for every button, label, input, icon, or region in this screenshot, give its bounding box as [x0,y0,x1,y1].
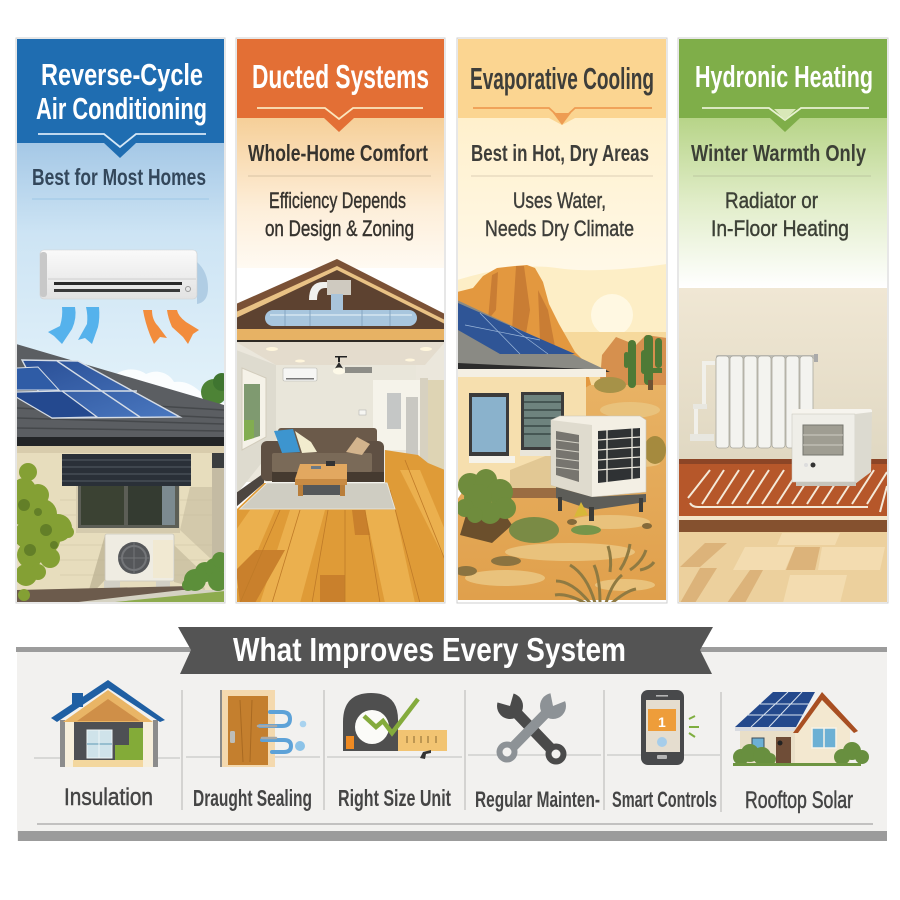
icon: smart phone control [641,690,699,765]
subheading: Best for Most Homes [32,164,206,190]
outdoor unit [104,534,174,590]
sun [591,294,633,336]
floor tiles [678,532,888,603]
icon: wall air conditioner [40,250,208,304]
heading [36,63,206,126]
windows [469,392,564,463]
label: Right Size Unit [338,785,451,811]
boiler unit [792,409,872,486]
panel: ducted systems [236,38,445,603]
label: Smart Controls [612,787,717,812]
title ribbon: What Improves Every System [233,631,626,668]
shrub left [17,463,74,601]
rule lines and chevron [32,134,209,199]
shrub right [182,552,228,591]
icon: insulation house [51,680,165,767]
icon: crossed wrenches [496,690,568,764]
wood floor [236,450,445,603]
desert shrubs [455,469,654,603]
rule lines and chevron [248,108,431,176]
label: Insulation [64,784,153,811]
arrows: cool air [48,307,99,344]
heading: Air Conditioning [36,91,207,126]
icon: tape measure with check [343,693,447,759]
icon: smart phone control: 1 [658,714,666,730]
body text: Radiator or [725,188,818,213]
label: Regular Mainten- [475,787,600,812]
body text: In-Floor Heating [711,216,849,241]
heading: Reverse-Cycle [41,57,203,92]
window [76,486,180,533]
doorway [373,378,445,470]
house wall [458,377,586,490]
heated floor [678,459,888,532]
panel: what improves every system [16,627,887,841]
heading: Ducted Systems [252,58,429,95]
illustration: house with solar panels and outdoor unit [10,344,231,603]
radiator [716,354,818,448]
sofa [261,428,384,482]
label: Rooftop Solar [745,787,853,814]
illustration: attic ductwork [236,259,445,342]
panel: hydronic heating [678,38,888,603]
illustration: desert house with evaporative cooler [455,264,667,603]
cacti [624,335,662,388]
coffee table [295,461,347,496]
rug [240,483,395,509]
illustration: radiator and in-floor heating [678,288,888,603]
panel: evaporative cooling [455,38,667,603]
pipes [696,363,715,436]
title ribbon [178,627,713,674]
body text: Uses Water, [513,188,606,213]
mesa rock [457,265,593,392]
rule lines and chevron [693,108,871,176]
subheading: Best in Hot, Dry Areas [471,140,649,166]
body text [711,188,849,241]
awning [62,454,191,486]
body text [265,188,414,241]
icon: draught sealing door [220,690,306,767]
body text [485,188,634,241]
roof and solar [457,300,610,377]
icon: house with rooftop solar [733,692,869,766]
body text: Needs Dry Climate [485,216,634,241]
evaporative cooler [551,416,646,521]
body text: on Design & Zoning [265,216,414,241]
window [242,368,266,450]
subheading: Whole-Home Comfort [248,140,428,166]
body text: Efficiency Depends [269,188,406,213]
rule lines and chevron [471,108,653,176]
heading: Evaporative Cooling [470,61,654,96]
illustration: living room [236,342,445,603]
wall AC unit [283,368,317,381]
ceiling fan lamp [333,356,347,374]
arrows: warm air [143,310,199,344]
label: Draught Sealing [193,785,312,811]
panel: reverse-cycle air conditioning [10,38,231,603]
ceiling lights [266,347,432,362]
